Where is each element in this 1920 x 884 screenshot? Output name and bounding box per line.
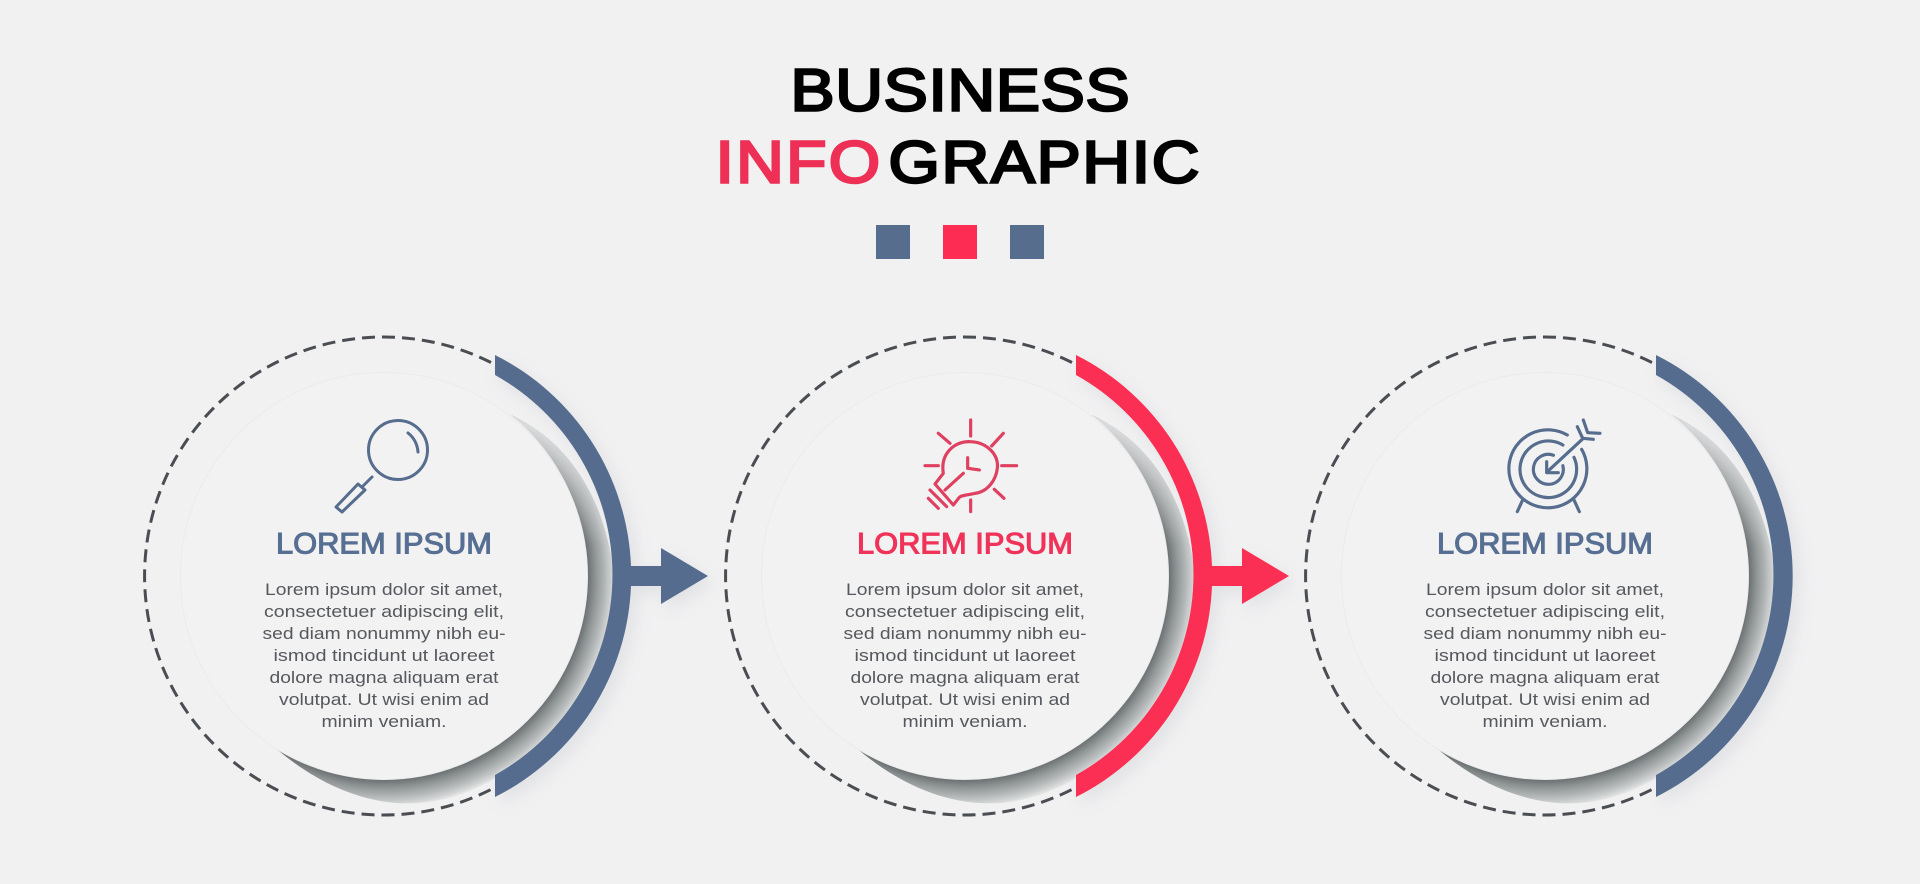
body text: Lorem ipsum dolor sit amet, xyxy=(1426,580,1664,599)
body text xyxy=(844,580,1086,731)
curl shadow xyxy=(1433,415,1774,803)
curl shadow xyxy=(272,415,613,803)
dashed ring xyxy=(145,337,491,815)
body text: minim veniam. xyxy=(1482,712,1608,731)
heading: LOREM IPSUM xyxy=(857,528,1073,560)
body text: Lorem ipsum dolor sit amet, xyxy=(265,580,503,599)
body text: dolore magna aliquam erat xyxy=(1430,668,1660,687)
body text: volutpat. Ut wisi enim ad xyxy=(860,690,1070,709)
icon: magnifying glass xyxy=(336,420,428,512)
body text: ismod tincidunt ut laoreet xyxy=(274,646,495,665)
title: BUSINESS xyxy=(790,58,1130,124)
heading: LOREM IPSUM xyxy=(1437,528,1653,560)
panel: step 3 xyxy=(1306,337,1793,815)
body text: volutpat. Ut wisi enim ad xyxy=(279,690,489,709)
body text: ismod tincidunt ut laoreet xyxy=(1434,646,1656,665)
inner disc xyxy=(180,372,588,780)
title: INFO xyxy=(716,130,880,196)
body text xyxy=(1424,580,1666,731)
body text: sed diam nonummy nibh eu- xyxy=(844,624,1086,643)
title xyxy=(716,58,1200,196)
body text: sed diam nonummy nibh eu- xyxy=(262,624,506,643)
dashed ring xyxy=(726,337,1072,815)
curl shadow xyxy=(853,415,1194,803)
red arc with arrow xyxy=(1076,355,1289,797)
blue arc xyxy=(1656,355,1793,797)
inner disc xyxy=(1342,372,1748,780)
dashed ring xyxy=(1306,337,1652,815)
body text: ismod tincidunt ut laoreet xyxy=(854,646,1076,665)
body text xyxy=(262,580,506,731)
body text: minim veniam. xyxy=(902,712,1028,731)
body text: consectetuer adipiscing elit, xyxy=(1425,602,1665,621)
title: GRAPHIC xyxy=(888,130,1200,196)
heading: LOREM IPSUM xyxy=(276,528,492,560)
panel: step 2 xyxy=(726,337,1289,815)
inner disc xyxy=(762,372,1168,780)
body text: minim veniam. xyxy=(322,712,446,731)
body text: consectetuer adipiscing elit, xyxy=(264,602,504,621)
body text: dolore magna aliquam erat xyxy=(850,668,1080,687)
body text: volutpat. Ut wisi enim ad xyxy=(1440,690,1650,709)
blue arc with arrow xyxy=(495,355,708,797)
icon: target with arrow xyxy=(1509,420,1600,512)
body text: sed diam nonummy nibh eu- xyxy=(1424,624,1666,643)
three title squares xyxy=(876,225,1044,259)
panel: step 1 xyxy=(145,337,708,815)
body text: dolore magna aliquam erat xyxy=(270,668,499,687)
body text: consectetuer adipiscing elit, xyxy=(845,602,1085,621)
body text: Lorem ipsum dolor sit amet, xyxy=(846,580,1084,599)
icon: light bulb with clock xyxy=(925,420,1017,512)
